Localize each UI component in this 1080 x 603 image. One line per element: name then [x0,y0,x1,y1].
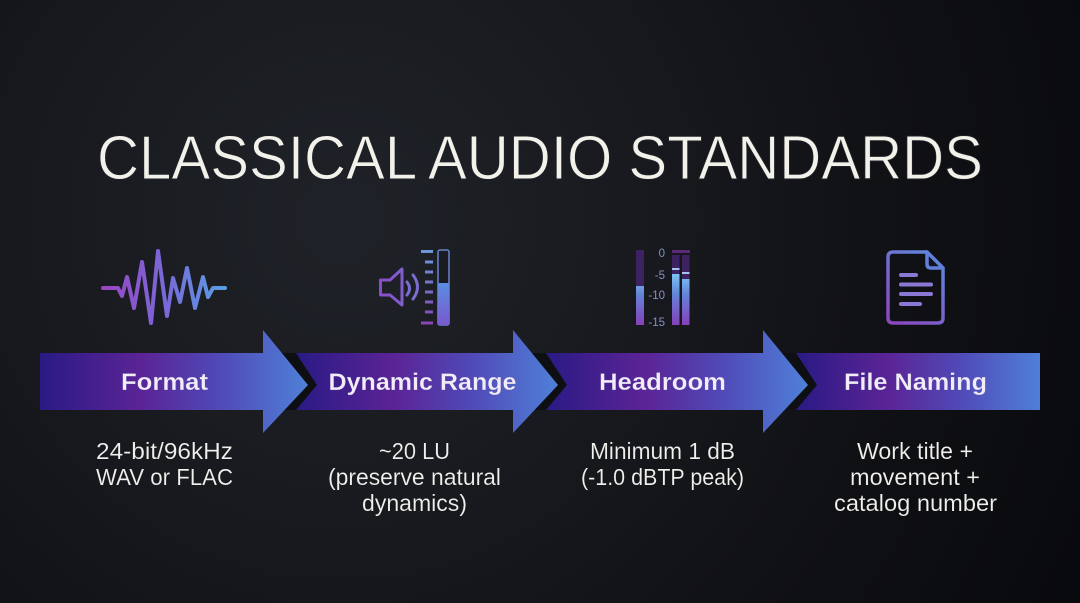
arrow: Headroom: Headroom [599,369,726,396]
icon: level meters [636,248,690,329]
arrow: Format [40,330,308,433]
title: CLASSICAL AUDIO STANDARDS [97,124,983,193]
arrow: Dynamic Range: Dynamic Range [328,369,516,396]
text: Dynamic Range details: ~20 LU [379,438,450,464]
text: Dynamic Range details: (preserve natural [328,464,501,490]
icon: speaker with volume scale [380,250,449,325]
icon: waveform [103,251,225,323]
text: File Naming details [834,438,997,516]
arrow: Format: Format [121,369,208,396]
text: Headroom details [581,438,744,490]
icon: level meters: 0 [659,248,665,260]
icon: level meters: -5 [655,270,665,282]
arrow: Headroom [546,330,808,433]
text: Dynamic Range details [328,438,501,516]
text: File Naming details: movement + [850,464,980,490]
text: Format details: WAV or FLAC [96,464,233,490]
arrow: File Naming [796,353,1040,410]
text: File Naming details: Work title + [857,438,973,464]
icon: level meters: -15 [648,317,665,329]
text: Format details: 24-bit/96kHz [96,438,233,464]
text: Headroom details: Minimum 1 dB [590,438,735,464]
icon: document [888,252,943,323]
arrow: Dynamic Range [296,330,558,433]
text: Format details [96,438,233,490]
icon: level meters: -10 [648,290,665,302]
text: File Naming details: catalog number [834,490,997,516]
text: Dynamic Range details: dynamics) [362,490,467,516]
arrow: File Naming: File Naming [844,369,987,396]
text: Headroom details: (-1.0 dBTP peak) [581,464,744,490]
